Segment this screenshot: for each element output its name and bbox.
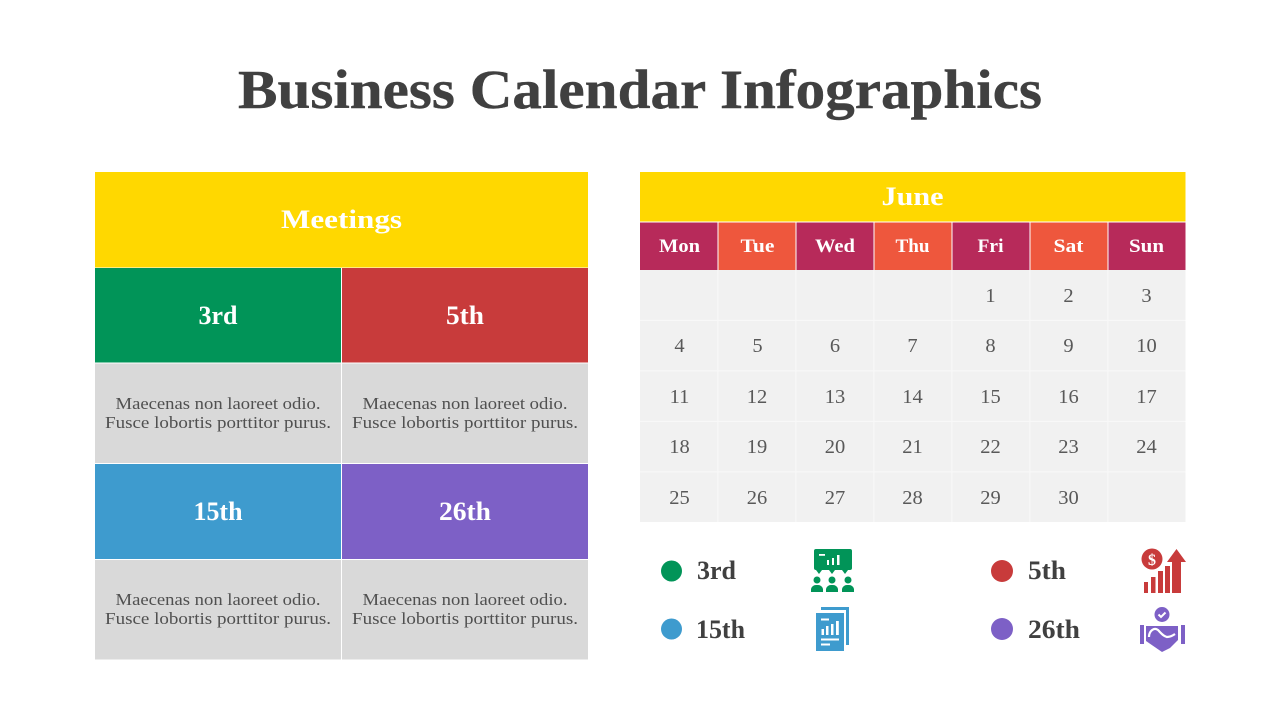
header: 3rd: [95, 268, 341, 362]
weekday header row: Mon: [659, 237, 701, 257]
text block: 15th: Fusce lobortis porttitor purus.: [105, 609, 331, 628]
meetings heading: Meetings: [281, 205, 402, 234]
date grid: 14: [902, 386, 923, 408]
legend: 26th: [991, 615, 1081, 644]
date grid: 27: [825, 487, 845, 509]
date grid: 15: [980, 386, 1001, 408]
legend: 3rd: [661, 556, 737, 585]
month heading: June: [882, 182, 944, 211]
date grid: 11: [670, 386, 689, 408]
date grid: 2: [1063, 285, 1074, 307]
date grid: 30: [1058, 487, 1079, 509]
header: 5th: 5th: [446, 301, 485, 330]
date grid: 21: [902, 436, 923, 458]
month heading: [640, 172, 1186, 222]
date grid: 19: [747, 436, 767, 458]
date grid: 7: [907, 335, 918, 357]
icon: report document: [816, 607, 849, 651]
header: 26th: [342, 464, 588, 559]
panel: June calendar: [640, 172, 1186, 522]
date grid: 24: [1136, 436, 1157, 458]
date grid: 9: [1063, 335, 1074, 357]
date grid: 16: [1058, 386, 1079, 408]
header: 15th: 15th: [194, 497, 243, 526]
date grid: 8: [985, 335, 996, 357]
date grid: 26: [747, 487, 767, 509]
date grid: 3: [1141, 285, 1152, 307]
date grid: 22: [980, 436, 1001, 458]
header: 15th: [95, 464, 341, 559]
text block: 3rd: Maecenas non laoreet odio.: [116, 394, 320, 413]
icon: meeting presentation: [811, 549, 854, 592]
weekday header row: [640, 222, 1186, 270]
header: 26th: 26th: [439, 497, 492, 526]
header: 3rd: 3rd: [198, 301, 238, 330]
legend: 26th: 26th: [1028, 615, 1081, 644]
date grid: 12: [747, 386, 767, 408]
date grid: 29: [980, 487, 1001, 509]
date grid: 5: [752, 335, 763, 357]
date grid: 25: [669, 487, 690, 509]
weekday header row: Thu: [896, 237, 930, 257]
text block: 5th: Maecenas non laoreet odio.: [362, 394, 568, 413]
meetings heading: [95, 172, 588, 268]
legend: 3rd: 3rd: [697, 556, 737, 585]
icon: revenue growth: [1142, 548, 1186, 593]
date grid: 6: [830, 335, 840, 357]
text block: 15th: [95, 560, 341, 660]
weekday header row: Tue: [740, 237, 774, 257]
date grid: 23: [1058, 436, 1079, 458]
legend: 15th: 15th: [696, 615, 746, 644]
date grid: [640, 270, 1186, 522]
text block: 5th: Fusce lobortis porttitor purus.: [352, 413, 578, 432]
legend: 5th: 5th: [1028, 556, 1067, 585]
icon: handshake agreement: [1140, 607, 1185, 652]
text block: 3rd: Fusce lobortis porttitor purus.: [105, 413, 331, 432]
text block: 15th: Maecenas non laoreet odio.: [116, 590, 320, 609]
date grid: 17: [1136, 386, 1157, 408]
weekday header row: Wed: [815, 237, 856, 257]
date grid: 18: [669, 436, 690, 458]
date grid: 20: [825, 436, 845, 458]
date grid: 28: [902, 487, 923, 509]
date grid: 1: [985, 285, 996, 307]
date grid: 4: [674, 335, 685, 357]
weekday header row: Sun: [1129, 237, 1165, 257]
panel: meetings table: [95, 172, 588, 660]
text block: 5th: [342, 364, 588, 463]
header: 5th: [342, 268, 588, 362]
text block: 26th: [342, 560, 588, 660]
date grid: 13: [825, 386, 845, 408]
legend: 15th: [661, 615, 746, 644]
legend: 5th: [991, 556, 1067, 585]
date grid: 10: [1136, 335, 1157, 357]
text block: 26th: Maecenas non laoreet odio.: [362, 590, 568, 609]
weekday header row: Fri: [978, 237, 1004, 257]
icon: revenue growth: $: [1148, 552, 1156, 569]
title: Business Calendar Infographics: [238, 59, 1042, 120]
weekday header row: Sat: [1054, 237, 1084, 257]
text block: 26th: Fusce lobortis porttitor purus.: [352, 609, 578, 628]
text block: 3rd: [95, 364, 341, 463]
